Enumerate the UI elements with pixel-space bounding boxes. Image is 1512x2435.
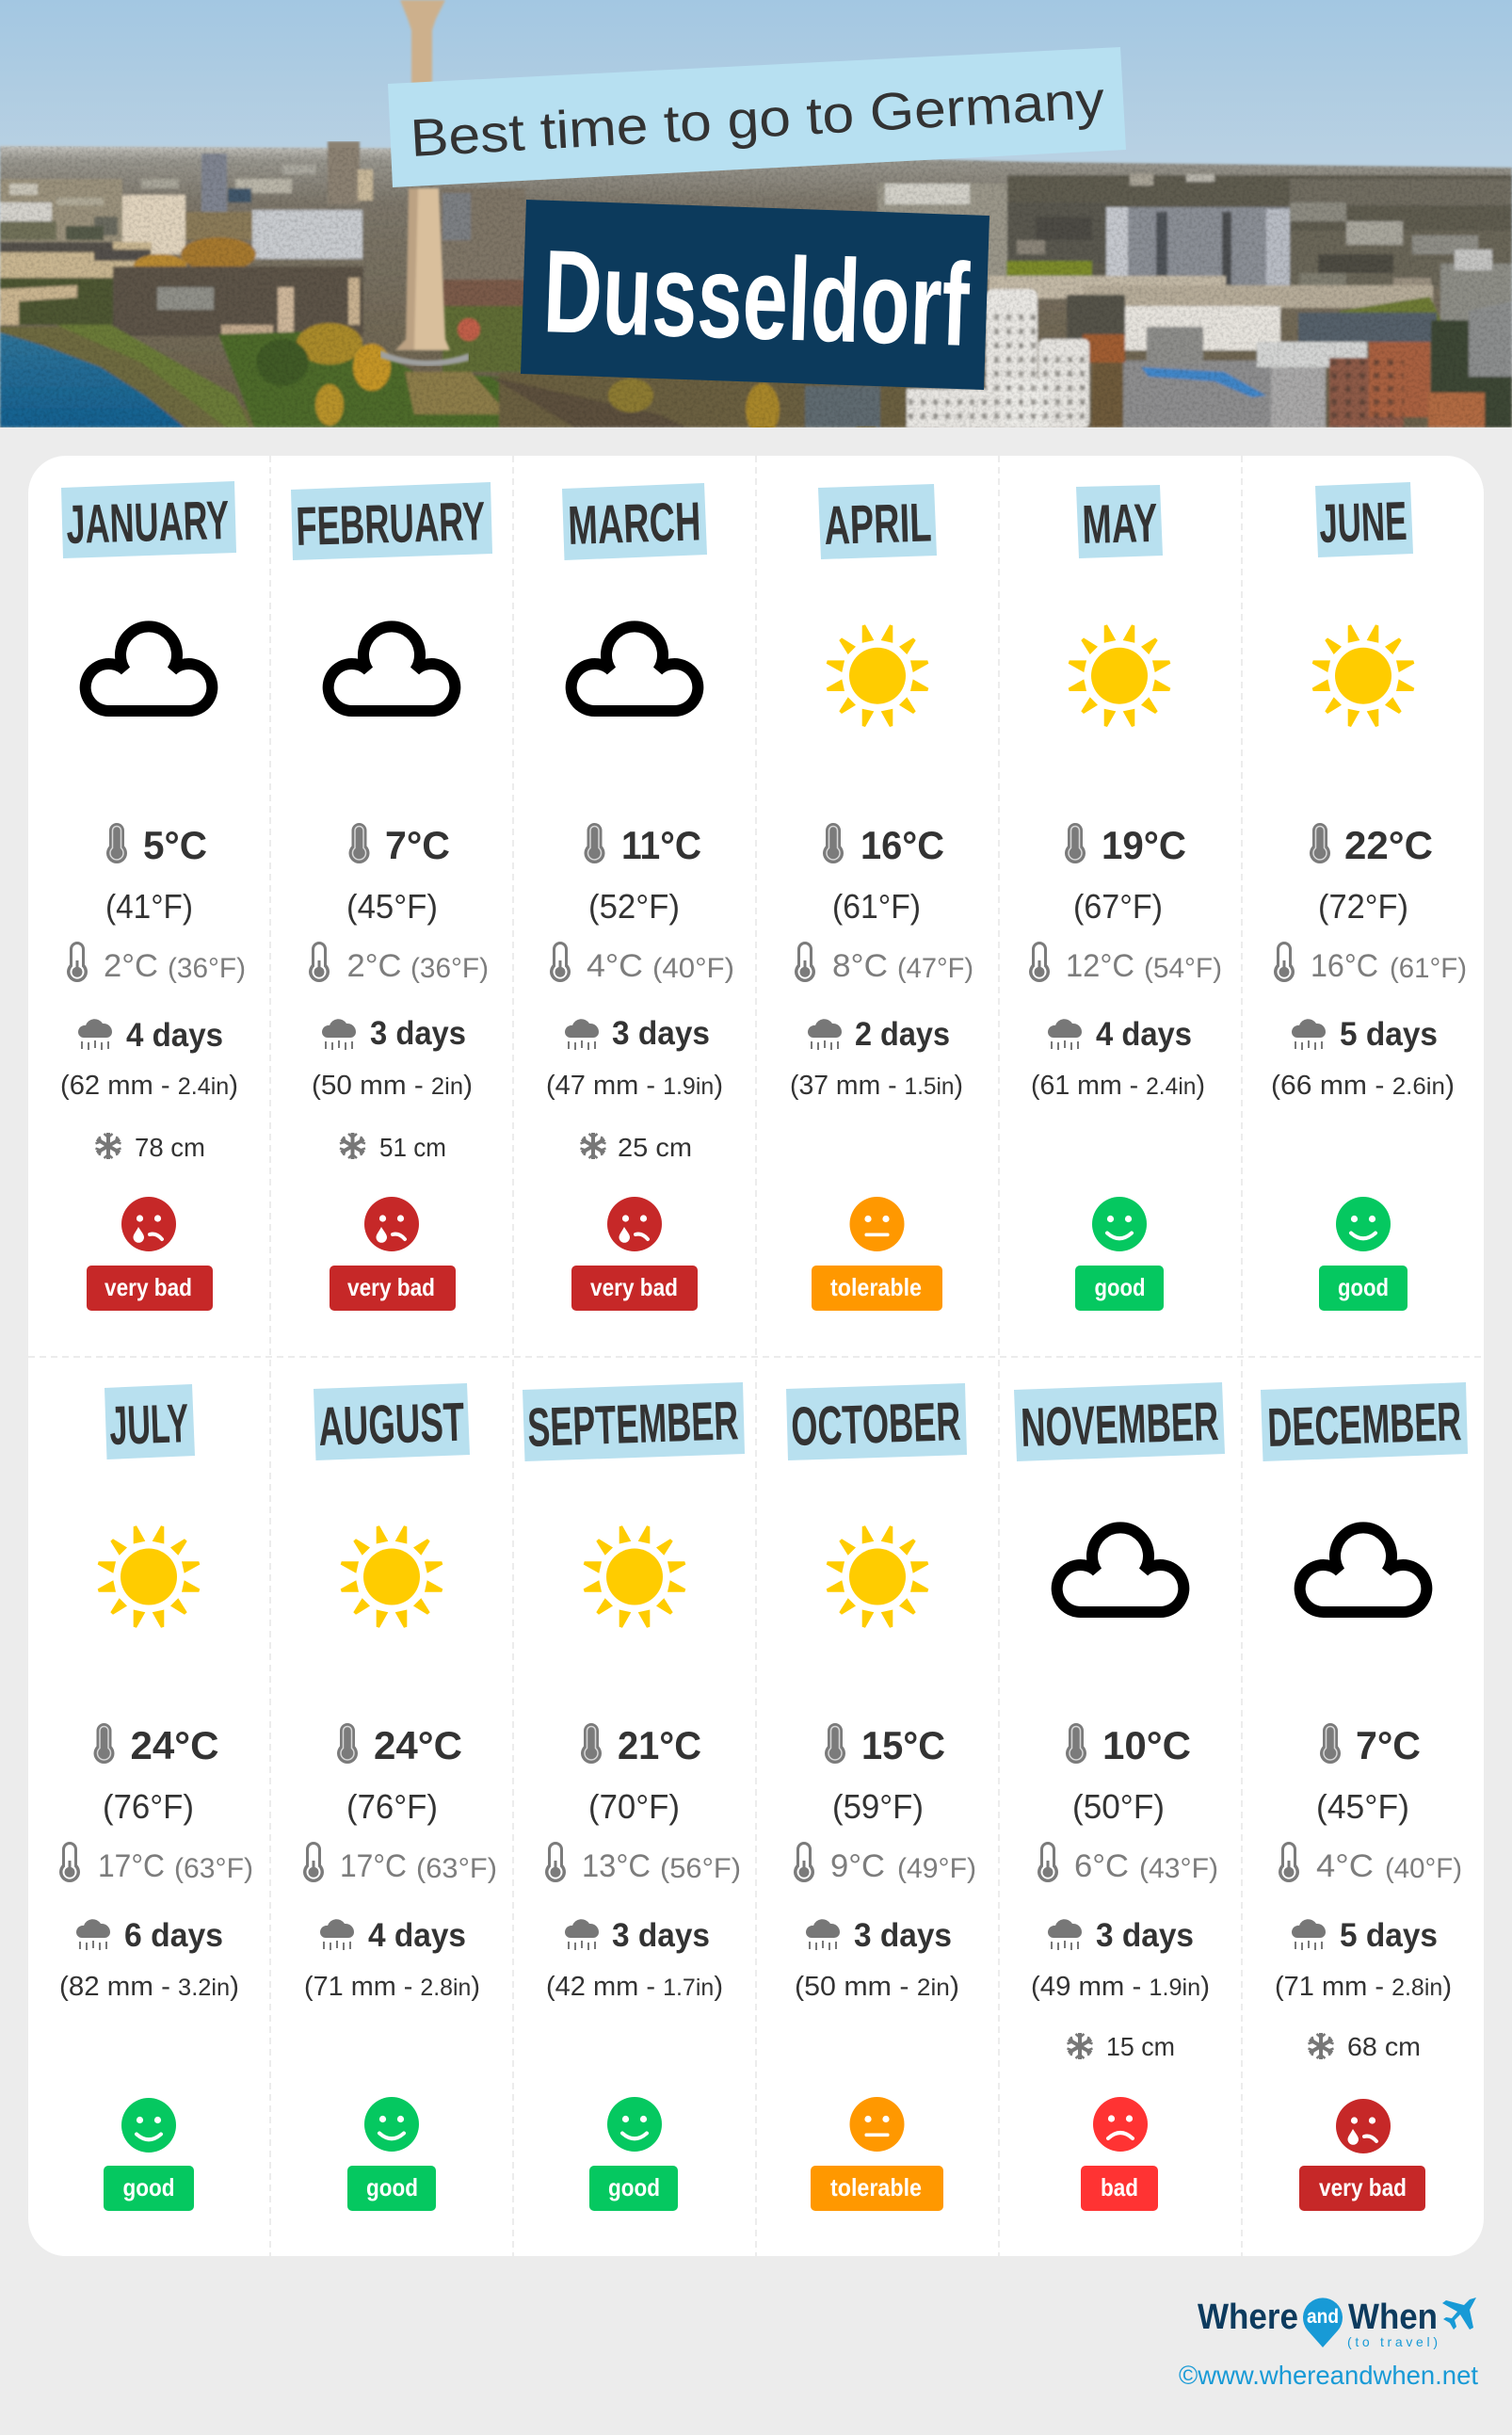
panel: January bbox=[60, 481, 246, 1311]
low temperature: (63°F) bbox=[174, 1853, 253, 1884]
rainfall: (71 mm - 2.8in) bbox=[1275, 1972, 1452, 2002]
average temperature bbox=[346, 823, 450, 926]
low temperature: (47°F) bbox=[897, 953, 973, 984]
snowfall bbox=[1068, 2032, 1175, 2061]
rainfall: (62 mm - 2.4in) bbox=[60, 1071, 238, 1101]
rainfall: (37 mm - 1.5in) bbox=[790, 1071, 963, 1101]
snowfall: 15 cm bbox=[1106, 2032, 1175, 2061]
snowfall bbox=[1309, 2032, 1421, 2061]
low temperature: (43°F) bbox=[1139, 1853, 1218, 1884]
panel: monthly climate card bbox=[28, 456, 1484, 2256]
rainfall: 5 days bbox=[1340, 1016, 1438, 1053]
average temperature: 24°C bbox=[130, 1723, 218, 1767]
icon: cloud bbox=[571, 626, 698, 711]
average temperature: 7°C bbox=[1356, 1723, 1421, 1767]
low temperature: 13°C bbox=[582, 1848, 651, 1884]
panel: November bbox=[1014, 1382, 1225, 2211]
average temperature bbox=[94, 1723, 218, 1826]
average temperature: 5°C bbox=[143, 823, 207, 867]
average temperature: (50°F) bbox=[1072, 1787, 1165, 1826]
low temperature bbox=[309, 942, 489, 984]
heading: June bbox=[1315, 482, 1413, 557]
low temperature bbox=[1037, 1842, 1218, 1884]
average temperature: 7°C bbox=[385, 823, 450, 867]
logo: Where and When (to travel): When bbox=[1348, 2298, 1438, 2337]
average temperature: (76°F) bbox=[103, 1787, 194, 1826]
rating: good: good bbox=[1094, 1273, 1145, 1301]
heading: May: MAY bbox=[1082, 492, 1158, 556]
low temperature: (61°F) bbox=[1390, 953, 1467, 984]
rainfall bbox=[60, 1017, 238, 1101]
low temperature bbox=[1274, 942, 1467, 984]
panel: October bbox=[786, 1383, 976, 2211]
low temperature: 8°C bbox=[832, 948, 888, 984]
rating: very bad bbox=[571, 1197, 698, 1311]
heading: March: MARCH bbox=[567, 491, 701, 556]
low temperature bbox=[794, 1842, 976, 1884]
low temperature: 6°C bbox=[1074, 1848, 1129, 1884]
snowfall: 68 cm bbox=[1347, 2032, 1421, 2061]
rainfall bbox=[304, 1917, 480, 2002]
low temperature bbox=[795, 942, 973, 984]
panel: July bbox=[59, 1384, 253, 2211]
header photo: Dusseldorf skyline bbox=[0, 0, 1512, 436]
rating: tolerable bbox=[812, 1197, 942, 1311]
average temperature: (52°F) bbox=[588, 887, 680, 926]
average temperature: 16°C bbox=[861, 823, 944, 867]
icon: sun bbox=[827, 1525, 928, 1628]
rainfall bbox=[546, 1015, 723, 1101]
low temperature: 9°C bbox=[830, 1848, 885, 1884]
city banner: Dusseldorf: Dusseldorf bbox=[541, 226, 972, 371]
average temperature: 24°C bbox=[374, 1723, 462, 1767]
average temperature: 22°C bbox=[1344, 823, 1433, 867]
low temperature: (40°F) bbox=[652, 953, 734, 984]
average temperature: 11°C bbox=[621, 823, 701, 867]
panel: August bbox=[303, 1383, 497, 2211]
low temperature: 4°C bbox=[1316, 1848, 1374, 1884]
heading: June: JUNE bbox=[1318, 491, 1407, 555]
low temperature: (56°F) bbox=[660, 1853, 741, 1884]
left buildings bbox=[122, 195, 185, 254]
rainfall: 3 days bbox=[1096, 1917, 1194, 1954]
rating: bad: bad bbox=[1101, 2173, 1138, 2201]
rainfall: (42 mm - 1.7in) bbox=[546, 1972, 723, 2002]
panel: May bbox=[1029, 485, 1222, 1311]
website credit: ©www.whereandwhen.net bbox=[1179, 2361, 1478, 2390]
low temperature bbox=[1279, 1842, 1462, 1884]
heading: October bbox=[786, 1383, 967, 1460]
low temperature bbox=[303, 1842, 497, 1884]
low temperature bbox=[59, 1842, 253, 1884]
rainfall: (47 mm - 1.9in) bbox=[546, 1071, 723, 1101]
snowfall: 51 cm bbox=[379, 1133, 446, 1162]
rating: very bad: very bad bbox=[347, 1273, 435, 1301]
rating: very bad: very bad bbox=[590, 1273, 678, 1301]
heading: July bbox=[105, 1384, 195, 1459]
logo: Where and When (to travel): (to travel) bbox=[1347, 2334, 1438, 2349]
icon: cloud bbox=[1300, 1527, 1426, 1612]
low temperature: 17°C bbox=[340, 1848, 407, 1884]
rainfall: 3 days bbox=[854, 1917, 952, 1954]
rainfall bbox=[312, 1015, 473, 1101]
rating: very bad bbox=[87, 1197, 213, 1311]
rainfall bbox=[795, 1917, 959, 2002]
icon: sun bbox=[1312, 624, 1414, 727]
rainfall: 6 days bbox=[124, 1917, 223, 1954]
rating: good: good bbox=[1338, 1273, 1389, 1301]
rainfall: 2 days bbox=[855, 1016, 950, 1053]
average temperature bbox=[1065, 823, 1186, 926]
low temperature: (63°F) bbox=[416, 1853, 497, 1884]
rainfall: (82 mm - 3.2in) bbox=[59, 1972, 239, 2002]
logo: Where and When (to travel) bbox=[1198, 2298, 1476, 2349]
average temperature: 10°C bbox=[1102, 1723, 1191, 1767]
rainfall bbox=[546, 1917, 723, 2002]
right buildings bbox=[877, 184, 1007, 280]
heading: August: AUGUST bbox=[317, 1392, 465, 1458]
average temperature bbox=[105, 823, 207, 926]
rating: good: good bbox=[366, 2173, 418, 2201]
rating: good bbox=[104, 2098, 194, 2211]
average temperature: (61°F) bbox=[832, 887, 921, 926]
rainfall: 4 days bbox=[126, 1017, 223, 1054]
average temperature: (72°F) bbox=[1318, 887, 1408, 926]
snowfall bbox=[580, 1133, 692, 1162]
low temperature bbox=[67, 942, 246, 984]
rainfall: (50 mm - 2in) bbox=[795, 1972, 959, 2002]
low temperature bbox=[550, 942, 734, 984]
heading: July: JULY bbox=[108, 1393, 189, 1457]
low temperature: 12°C bbox=[1066, 948, 1134, 984]
rating: good bbox=[589, 2097, 678, 2211]
average temperature: (70°F) bbox=[588, 1787, 680, 1826]
rainfall: (71 mm - 2.8in) bbox=[304, 1972, 480, 2002]
rating: tolerable: tolerable bbox=[830, 1273, 922, 1301]
average temperature: 21°C bbox=[618, 1723, 701, 1767]
snowfall bbox=[96, 1133, 205, 1162]
lower centre bbox=[499, 373, 913, 427]
rainfall bbox=[59, 1917, 239, 2002]
panel: April bbox=[790, 484, 973, 1311]
rainfall: 4 days bbox=[1096, 1016, 1192, 1053]
rating: very bad: very bad bbox=[1319, 2173, 1407, 2201]
rating: very bad bbox=[1299, 2099, 1425, 2211]
rating: bad bbox=[1081, 2097, 1158, 2211]
rating: tolerable bbox=[811, 2097, 943, 2211]
heading: April: APRIL bbox=[823, 492, 932, 556]
low temperature: 2°C bbox=[346, 948, 401, 984]
low temperature: (49°F) bbox=[897, 1853, 976, 1884]
title banner: Best time to go to Germany: Best time to go to Germany bbox=[409, 70, 1106, 168]
low temperature bbox=[1029, 942, 1222, 984]
heading: February bbox=[291, 482, 492, 560]
rating: good bbox=[1319, 1197, 1407, 1311]
panel: March bbox=[546, 483, 734, 1311]
heading: August bbox=[314, 1383, 470, 1460]
average temperature bbox=[1310, 823, 1433, 926]
rating: tolerable: tolerable bbox=[830, 2173, 922, 2201]
area right of tower bbox=[441, 188, 525, 198]
heading: January bbox=[61, 481, 236, 558]
rainfall: 4 days bbox=[368, 1917, 466, 1954]
panel: September bbox=[523, 1382, 745, 2211]
average temperature: 19°C bbox=[1102, 823, 1186, 867]
panel: February bbox=[291, 482, 492, 1311]
average temperature bbox=[823, 823, 944, 926]
heading: September bbox=[523, 1382, 745, 1461]
heading: May bbox=[1076, 485, 1163, 558]
average temperature bbox=[825, 1723, 945, 1826]
heading: September: SEPTEMBER bbox=[526, 1390, 739, 1459]
low temperature: 2°C bbox=[104, 948, 158, 984]
rainfall bbox=[1031, 1016, 1205, 1101]
low temperature: (36°F) bbox=[410, 953, 489, 984]
rainfall bbox=[1275, 1917, 1452, 2002]
icon: sun bbox=[98, 1525, 200, 1628]
average temperature: (41°F) bbox=[105, 887, 193, 926]
rainfall: 3 days bbox=[370, 1015, 466, 1052]
average temperature: (67°F) bbox=[1073, 887, 1163, 926]
heading: November: NOVEMBER bbox=[1020, 1391, 1219, 1459]
snowfall bbox=[340, 1133, 446, 1162]
logo: Where and When (to travel): Where bbox=[1198, 2298, 1298, 2337]
icon: sun bbox=[341, 1525, 442, 1628]
average temperature: (45°F) bbox=[1316, 1787, 1409, 1826]
title banner: Best time to go to Germany bbox=[388, 47, 1126, 187]
rating: very bad: very bad bbox=[105, 1273, 192, 1301]
rating: good: good bbox=[608, 2173, 660, 2201]
rainfall bbox=[1271, 1016, 1455, 1101]
rainfall bbox=[790, 1016, 963, 1101]
icon: sun bbox=[827, 624, 928, 727]
heading: January: JANUARY bbox=[65, 490, 230, 556]
heading: April bbox=[818, 484, 937, 559]
icon: cloud bbox=[329, 626, 455, 711]
low temperature bbox=[545, 1842, 741, 1884]
city banner: Dusseldorf bbox=[521, 200, 989, 390]
low temperature: 4°C bbox=[587, 948, 643, 984]
average temperature bbox=[584, 823, 701, 926]
average temperature: (76°F) bbox=[346, 1787, 438, 1826]
average temperature: 15°C bbox=[861, 1723, 945, 1767]
average temperature bbox=[1316, 1723, 1421, 1826]
low temperature: (36°F) bbox=[168, 953, 246, 984]
rating: very bad bbox=[330, 1197, 456, 1311]
logo: Where and When (to travel): and bbox=[1307, 2306, 1339, 2328]
rating: good bbox=[347, 2097, 436, 2211]
rainfall: 3 days bbox=[612, 1015, 710, 1052]
rating: good bbox=[1075, 1197, 1164, 1311]
icon: sun bbox=[584, 1525, 685, 1628]
rainfall: (66 mm - 2.6in) bbox=[1271, 1071, 1455, 1101]
heading: March bbox=[562, 483, 707, 560]
heading: November bbox=[1014, 1382, 1225, 1461]
icon: cloud bbox=[1057, 1527, 1183, 1612]
rainfall: 3 days bbox=[612, 1917, 710, 1954]
rainfall: (50 mm - 2in) bbox=[312, 1071, 473, 1101]
average temperature bbox=[337, 1723, 462, 1826]
rating: good: good bbox=[122, 2173, 175, 2201]
rainfall: 5 days bbox=[1340, 1917, 1438, 1954]
low temperature: 16°C bbox=[1311, 948, 1378, 984]
snowfall: 78 cm bbox=[135, 1133, 205, 1162]
panel: December bbox=[1261, 1382, 1468, 2211]
tower bbox=[380, 0, 469, 366]
icon: sun bbox=[1069, 624, 1170, 727]
average temperature bbox=[1066, 1723, 1191, 1826]
average temperature: (45°F) bbox=[346, 887, 438, 926]
snowfall: 25 cm bbox=[618, 1133, 692, 1162]
heading: October: OCTOBER bbox=[790, 1391, 961, 1458]
rainfall: (61 mm - 2.4in) bbox=[1031, 1071, 1205, 1101]
average temperature bbox=[581, 1723, 701, 1826]
rainfall: (49 mm - 1.9in) bbox=[1031, 1972, 1210, 2002]
panel: June bbox=[1271, 482, 1467, 1311]
low temperature: 17°C bbox=[98, 1848, 165, 1884]
average temperature: (59°F) bbox=[832, 1787, 924, 1826]
heading: February: FEBRUARY bbox=[295, 491, 486, 557]
icon: cloud bbox=[86, 626, 212, 711]
low temperature: (54°F) bbox=[1144, 953, 1222, 984]
low temperature: (40°F) bbox=[1385, 1853, 1462, 1884]
rainfall bbox=[1031, 1917, 1210, 2002]
